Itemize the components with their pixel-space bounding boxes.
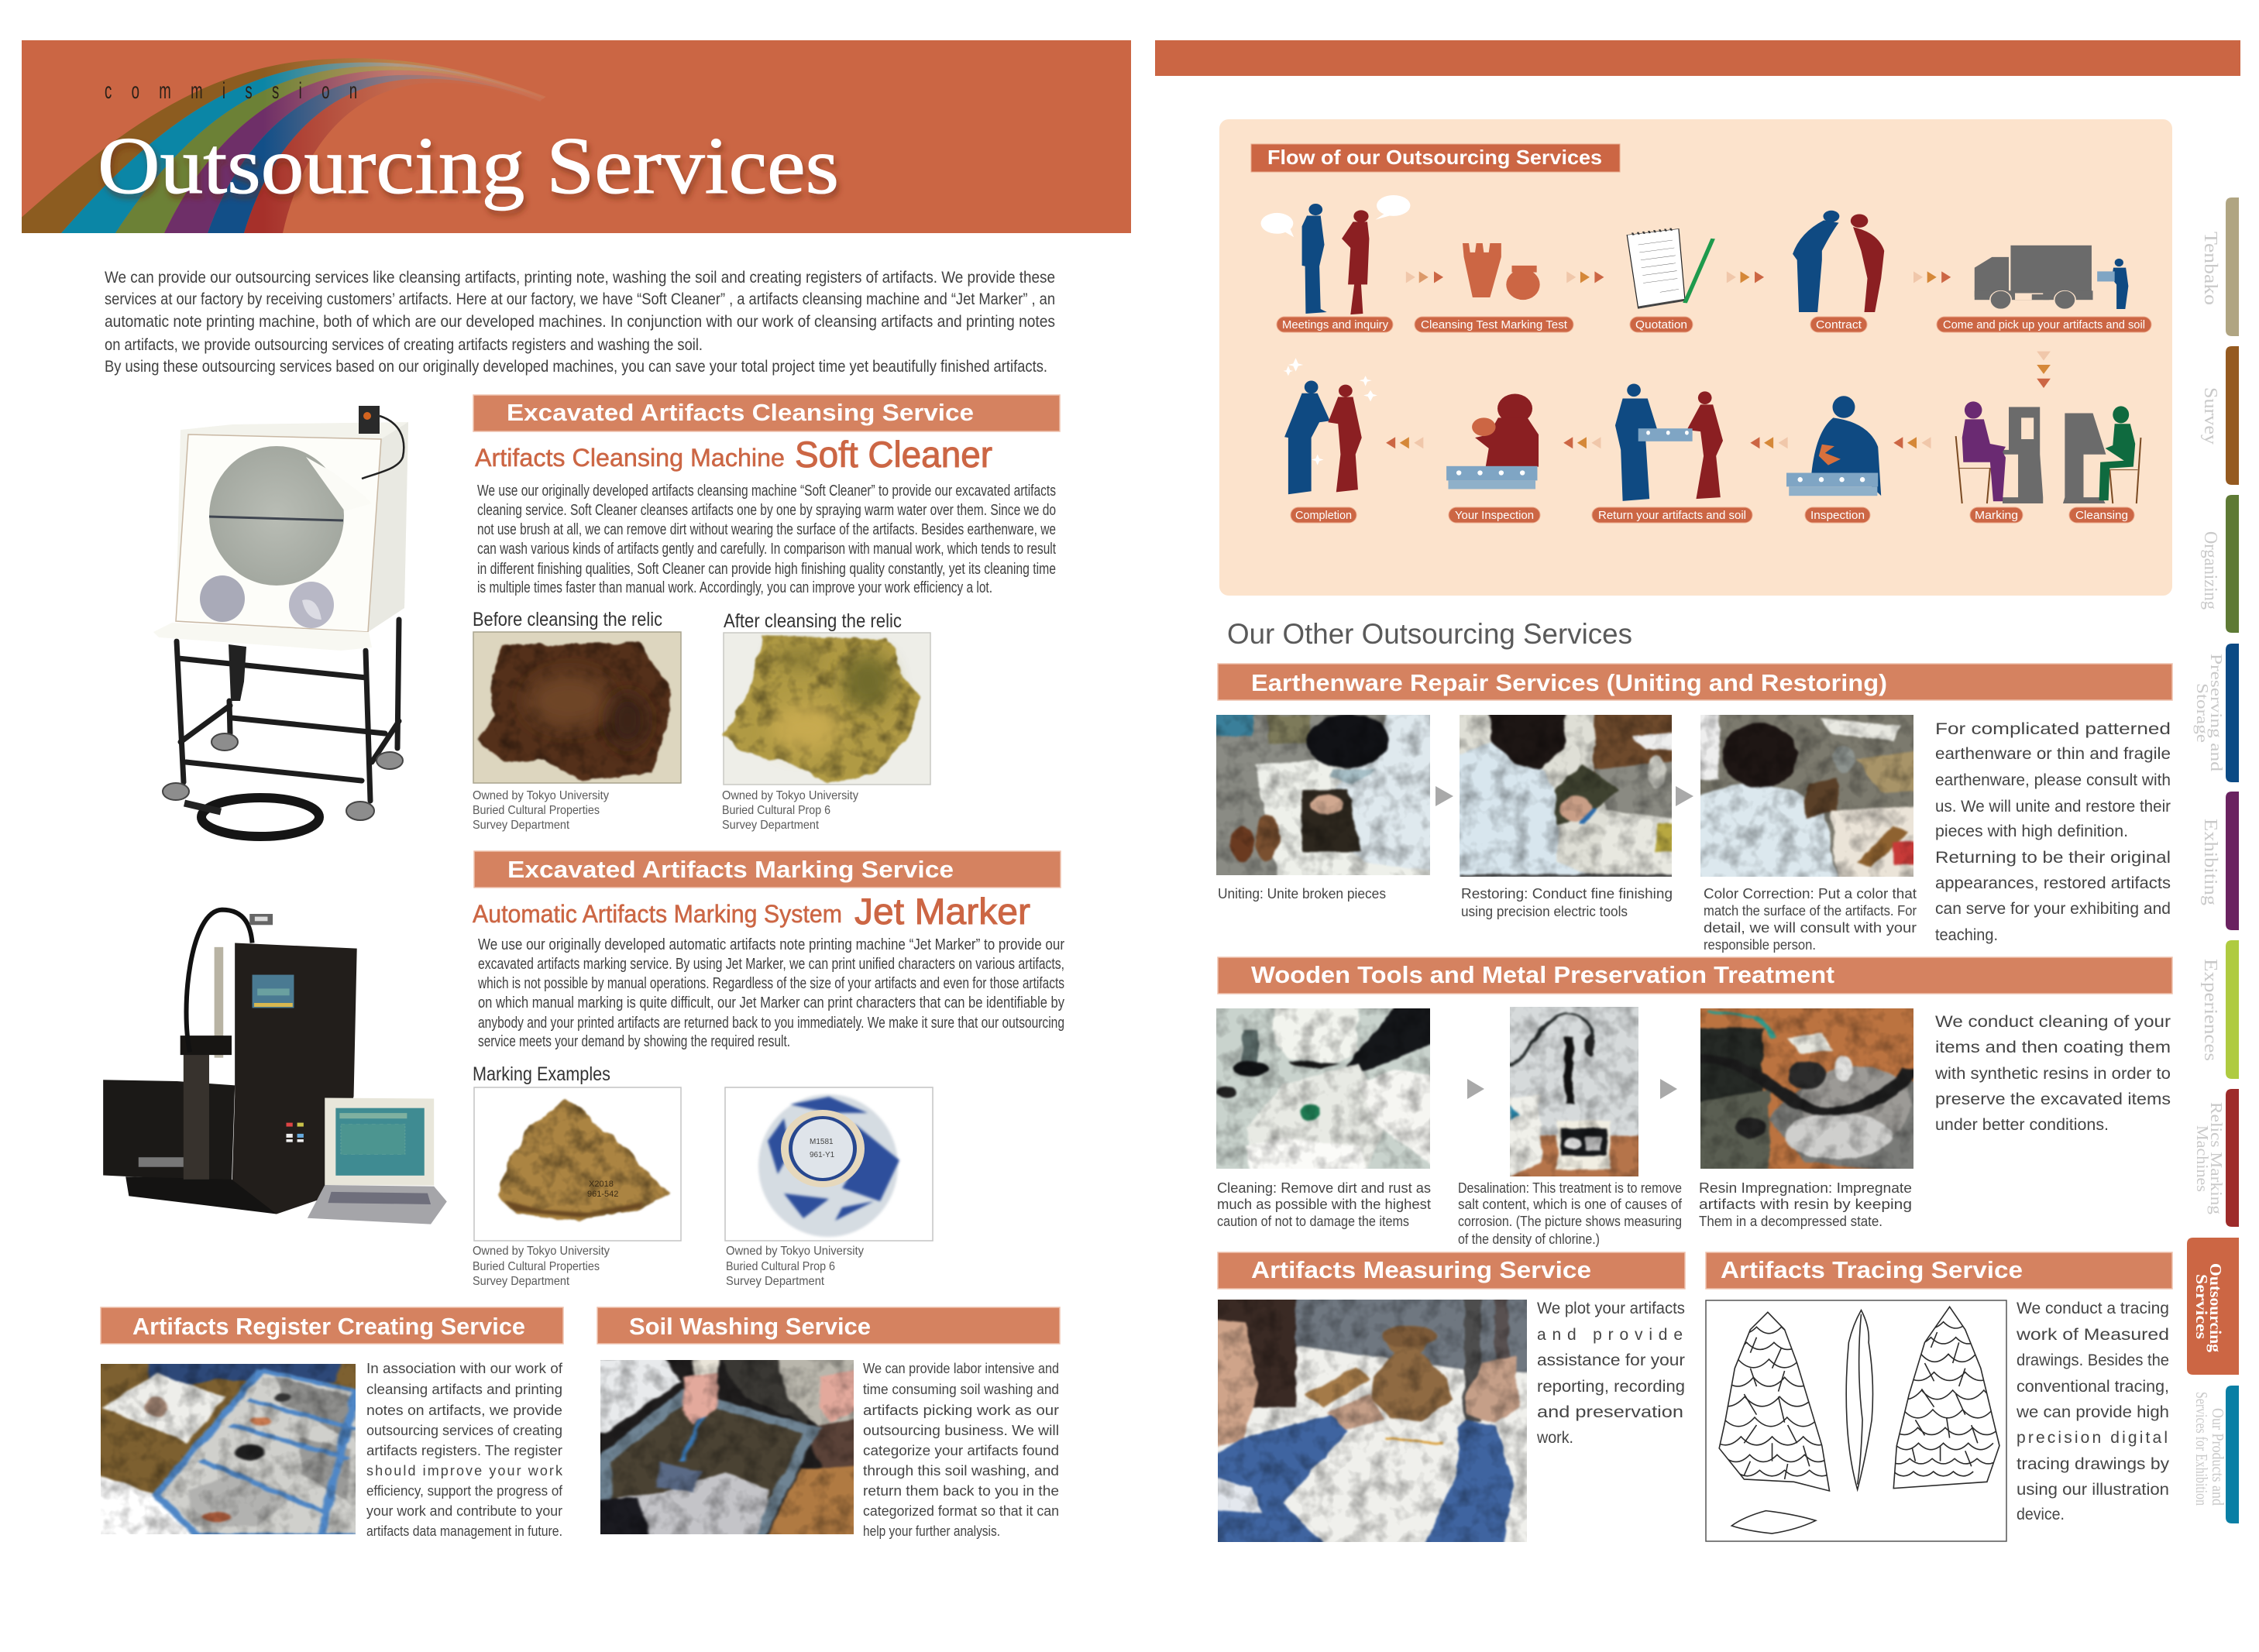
step labels: bottom row: Return your artifacts and soil <box>1598 509 1746 522</box>
eyebrow: commission: commission <box>105 78 357 104</box>
marking examples label: Marking Examples <box>473 1063 610 1085</box>
icon: return artifacts <box>1615 383 1723 501</box>
text block: register service: outsourcing services of creating <box>366 1423 562 1438</box>
text block: wooden tools: with synthetic resins in order to <box>1934 1065 2171 1083</box>
intro paragraph: We can provide our outsourcing services like cleansing artifacts, printing note, washing the soil and creating registers of artifacts. We provide these <box>105 269 1055 287</box>
step labels: top row: Cleansing Test Marking Test <box>1421 318 1568 331</box>
tab: Exhibiting: Exhibiting <box>2200 819 2220 905</box>
text block: earthenware repair: can serve for your exhibiting and <box>1935 900 2171 918</box>
section heading: wooden tools <box>1218 957 2172 994</box>
caption: restoring: Restoring: Conduct fine finishing <box>1461 886 1673 902</box>
text block: register service: efficiency, support the progress of <box>366 1483 563 1499</box>
tab: Our Products and Services for Exhibition: Services for Exhibition <box>2192 1392 2211 1506</box>
section heading: earthenware repair: Earthenware Repair Services (Uniting and Restoring) <box>1251 669 1887 696</box>
tab: Organizing <box>2200 495 2239 633</box>
caption: cleaning: caution of not to damage the items <box>1217 1214 1409 1229</box>
photo: marked bowl <box>725 1087 933 1241</box>
text block: Soft Cleaner description: cleaning service. Soft Cleaner cleanses artifacts one by one by spraying warm water over them. Since we do <box>477 502 1056 519</box>
caption: resin impregnation: Them in a decompressed state. <box>1699 1214 1882 1229</box>
step labels: bottom row: Your Inspection <box>1455 509 1534 522</box>
intro paragraph: automatic note printing machine, both of which are our developed machines. In conjunction with our work of cleansing artifacts and printing notes <box>105 313 1055 331</box>
photo: measuring <box>1218 1300 1527 1542</box>
caption: after relic: Survey Department <box>722 819 819 832</box>
right page top band <box>1155 40 2240 76</box>
tab: Organizing: Organizing <box>2200 531 2220 610</box>
control box and cable <box>359 406 380 434</box>
text block: tracing: work of Measured <box>2016 1326 2169 1344</box>
product title: Jet Marker <box>473 891 1030 932</box>
caption: cleaning: much as possible with the highest <box>1217 1197 1431 1212</box>
photo: resin impregnation <box>1700 1008 1913 1169</box>
text block: measuring: assistance for your <box>1537 1351 1685 1369</box>
section heading: soil washing <box>597 1307 1060 1344</box>
text block: Jet Marker description: anybody and your printed artifacts are returned back to you immediately. We make it sure that our outsourcing <box>478 1015 1064 1032</box>
step labels: top row <box>1277 317 2151 332</box>
section heading: cleansing <box>473 395 1060 431</box>
text block: register service <box>366 1361 563 1539</box>
text block: tracing <box>2016 1300 2170 1523</box>
caption: cleaning <box>1217 1180 1431 1229</box>
tab: Relics Marking Machines: Machines <box>2193 1125 2212 1192</box>
section heading: wooden tools: Wooden Tools and Metal Preservation Treatment <box>1251 961 1834 988</box>
caption: colour correction <box>1704 886 1917 953</box>
tab: Our Products and Services for Exhibition: Our Products and <box>2209 1408 2227 1506</box>
step labels: top row: Meetings and inquiry <box>1282 318 1388 331</box>
arrow: restoring to colour correction <box>1676 786 1693 806</box>
caption: bowl <box>726 1245 864 1288</box>
caption: before relic: Owned by Tokyo University <box>473 789 609 802</box>
caption: desalination: Desalination: This treatment is to remove <box>1458 1180 1682 1196</box>
panel heading: Flow of our Outsourcing Services <box>1267 146 1602 169</box>
photo: register creating <box>101 1364 356 1534</box>
caption: sherd: Owned by Tokyo University <box>473 1245 610 1258</box>
icon: marking and cleansing stations <box>1956 401 2140 503</box>
text block: register service: artifacts data management in future. <box>366 1523 562 1539</box>
coiled hose <box>201 798 319 836</box>
step labels: bottom row: Inspection <box>1810 509 1865 522</box>
caption: sherd: Buried Cultural Properties <box>473 1260 600 1273</box>
text block: soil washing: We can provide labor intensive and <box>863 1361 1059 1376</box>
caption: desalination: of the density of chlorine.) <box>1458 1231 1600 1247</box>
icon: quotation notepad <box>1627 228 1713 308</box>
caption: bowl: Buried Cultural Prop 6 <box>726 1260 835 1273</box>
text block: wooden tools: preserve the excavated items <box>1935 1090 2171 1108</box>
caption: desalination: corrosion. (The picture shows measuring <box>1458 1214 1682 1229</box>
section heading: marking <box>474 851 1061 888</box>
rainbow swoosh <box>4 58 546 233</box>
text block: earthenware repair: earthenware, please consult with <box>1935 771 2171 789</box>
text block: soil washing: time consuming soil washing and <box>863 1382 1059 1397</box>
photo: marked bowl: M1581 <box>810 1138 834 1146</box>
icon: inspection <box>1786 396 1881 496</box>
intro paragraph: services at our factory by receiving customers’ artifacts. Here at our factory, we have “Soft Cleaner” , a artifacts cleansing machine and “Jet Marker” , an <box>105 290 1055 308</box>
caption: colour correction: detail, we will consult with your <box>1704 920 1917 936</box>
icon: truck pickup <box>1975 246 2128 309</box>
tab: Experiences: Experiences <box>2200 959 2220 1061</box>
text block: earthenware repair: teaching. <box>1935 926 1998 944</box>
text block: register service: cleansing artifacts and printing <box>366 1382 562 1397</box>
caption: sherd: Survey Department <box>473 1275 569 1288</box>
caption: before relic: Survey Department <box>473 819 569 832</box>
text block: tracing: tracing drawings by <box>2017 1455 2170 1473</box>
arrow: uniting to restoring <box>1436 786 1453 806</box>
step labels: top row: Come and pick up your artifacts and soil <box>1943 318 2145 331</box>
text block: earthenware repair: earthenware or thin and fragile <box>1935 745 2171 763</box>
tab: Outsourcing Services (active): Services <box>2192 1274 2211 1339</box>
photo: restoring <box>1460 715 1672 877</box>
caption: bowl: Owned by Tokyo University <box>726 1245 864 1258</box>
product title: Soft Cleaner: Soft Cleaner <box>795 434 992 475</box>
heading: other services: Our Other Outsourcing Services <box>1227 618 1632 650</box>
tab: Exhibiting <box>2200 792 2239 930</box>
text block: earthenware repair: appearances, restored artifacts <box>1935 874 2171 892</box>
caption: after relic: Buried Cultural Prop 6 <box>722 804 830 817</box>
text block: Jet Marker description <box>477 936 1064 1050</box>
text block: register service: In association with our work of <box>366 1361 563 1376</box>
photo: marked sherd: X2018 <box>589 1180 614 1189</box>
caption: restoring: using precision electric tools <box>1461 904 1628 919</box>
photo: Jet Marker machine <box>103 910 447 1224</box>
text block: measuring: reporting, recording <box>1537 1378 1685 1396</box>
touch panel <box>253 975 294 1008</box>
button cluster <box>286 1123 304 1142</box>
tab: Outsourcing Services (active): Outsourcing <box>2206 1263 2225 1353</box>
text block: soil washing: categorized format so that it can <box>863 1503 1059 1519</box>
caption: before relic: Buried Cultural Properties <box>473 804 600 817</box>
text block: tracing: We conduct a tracing <box>2017 1300 2169 1317</box>
product title: Jet Marker: Jet Marker <box>854 891 1030 932</box>
caption: resin impregnation: Resin Impregnation: Impregnate <box>1699 1180 1912 1196</box>
caption: colour correction: match the surface of the artifacts. For <box>1704 903 1917 919</box>
support rods <box>215 947 223 1058</box>
text block: measuring <box>1536 1300 1685 1447</box>
tab: Outsourcing Services (active) <box>2187 1238 2239 1375</box>
arrows: downward <box>2037 352 2051 388</box>
product title: Soft Cleaner: Artifacts Cleansing Machine <box>475 444 785 472</box>
cabinet window <box>209 446 344 586</box>
caption: colour correction: responsible person. <box>1704 937 1816 953</box>
machine cabinet <box>232 943 357 1214</box>
icon: contract bow <box>1793 211 1884 312</box>
text block: Soft Cleaner description: not use brush at all, we can remove dirt without wearing the surface of the artifacts. Besides earthenware, we <box>477 521 1056 538</box>
text block: wooden tools: We conduct cleaning of your <box>1935 1013 2171 1031</box>
product title: Soft Cleaner <box>475 434 992 475</box>
text block: wooden tools <box>1934 1013 2171 1134</box>
text block: tracing: using our illustration <box>2017 1481 2169 1499</box>
text block: Soft Cleaner description: We use our originally developed artifacts cleansing machine “Soft Cleaner” to provide our excavated artifacts <box>477 483 1056 500</box>
section heading: register: Artifacts Register Creating Service <box>132 1313 525 1340</box>
tab: Relics Marking Machines <box>2193 1089 2239 1227</box>
caption: resin impregnation: artifacts with resin by keeping <box>1699 1197 1912 1212</box>
step labels: bottom row: Completion <box>1295 509 1352 522</box>
text block: soil washing: return them back to you in the <box>863 1483 1059 1499</box>
text block: soil washing: outsourcing business. We will <box>863 1423 1059 1438</box>
text block: earthenware repair: For complicated patterned <box>1935 720 2171 738</box>
text block: Jet Marker description: on which manual marking is quite difficult, our Jet Marker can print characters that can be identifiable by <box>478 994 1064 1011</box>
photo: marked bowl: 961-Y1 <box>810 1151 835 1159</box>
photo: colour correction <box>1700 715 1913 877</box>
caption: uniting: Uniting: Unite broken pieces <box>1218 886 1386 902</box>
laptop <box>308 1185 447 1224</box>
arrows: bottom row <box>1386 437 1931 448</box>
tab: Our Products and Services for Exhibition <box>2192 1386 2239 1523</box>
after label: After cleansing the relic <box>724 610 902 632</box>
text block: measuring: and provide <box>1537 1326 1683 1344</box>
caption: colour correction: Color Correction: Put a color that <box>1704 886 1917 902</box>
glove ports <box>200 575 245 622</box>
intro paragraph <box>105 269 1055 376</box>
text block: soil washing: help your further analysis. <box>863 1523 1000 1539</box>
tab: Survey: Survey <box>2200 387 2220 445</box>
caption: cleaning: Cleaning: Remove dirt and rust as <box>1217 1180 1431 1196</box>
tab: Preserving and Storage: Storage <box>2193 683 2212 743</box>
tab: Tenbako: Tenbako <box>2200 232 2220 305</box>
cabinet body <box>176 422 408 632</box>
photo: relic before cleansing <box>473 632 681 783</box>
tab: Preserving and Storage <box>2193 644 2239 782</box>
section heading: soil washing: Soil Washing Service <box>629 1313 871 1340</box>
text block: Soft Cleaner description <box>477 483 1056 596</box>
icon: completion handshake <box>1283 358 1377 494</box>
main title: Outsourcing Services <box>98 120 839 211</box>
text block: soil washing: categorize your artifacts found <box>863 1443 1059 1458</box>
tab: Preserving and Storage: Preserving and <box>2207 654 2226 772</box>
text block: register service: artifacts registers. The register <box>366 1443 562 1458</box>
photo: marked sherd: 961-542 <box>587 1190 618 1199</box>
side navigation tabs <box>2187 197 2239 1523</box>
icon: meetings and inquiry <box>1261 195 1410 314</box>
panel: flow of outsourcing services <box>1219 119 2172 596</box>
step labels: top row: Quotation <box>1635 318 1687 331</box>
intro paragraph: on artifacts, we provide outsourcing services of creating artifacts registers and washing the soil. <box>105 336 703 354</box>
text block: earthenware repair: pieces with high definition. <box>1935 823 2128 840</box>
step labels: bottom row: Cleansing <box>2075 509 2128 522</box>
text block: soil washing: through this soil washing, and <box>863 1463 1059 1479</box>
text block: tracing: conventional tracing, <box>2017 1378 2169 1396</box>
text block: Jet Marker description: excavated artifacts marking service. By using Jet Marker, we can print unified characters on various artifacts, <box>478 956 1064 973</box>
tab: Tenbako <box>2200 197 2239 336</box>
photo: uniting <box>1216 715 1430 875</box>
caption: resin impregnation <box>1699 1180 1912 1229</box>
arrows: top row <box>1406 271 1951 283</box>
section heading: measuring <box>1218 1252 1685 1289</box>
step labels: bottom row: Marking <box>1975 509 2018 522</box>
photo: soil washing <box>600 1360 854 1534</box>
icon: test pots <box>1463 243 1540 300</box>
text block: register service: your work and contribute to your <box>366 1503 562 1519</box>
text block: Jet Marker description: which is not possible by manual operations. Regardless of the size of your artifacts and even for those artifacts <box>477 975 1064 992</box>
text block: register service: notes on artifacts, we provide <box>366 1403 562 1418</box>
text block: tracing: we can provide high <box>2016 1403 2169 1421</box>
text block: soil washing <box>863 1361 1059 1539</box>
text block: soil washing: artifacts picking work as our <box>863 1403 1059 1418</box>
title banner <box>4 40 1131 233</box>
photo: desalination <box>1510 1007 1638 1176</box>
text block: Jet Marker description: We use our originally developed automatic artifacts note printing machine “Jet Marker” to provide our <box>478 936 1064 953</box>
section heading: marking: Excavated Artifacts Marking Service <box>507 856 954 883</box>
text block: register service: should improve your work <box>366 1463 563 1479</box>
text block: wooden tools: items and then coating them <box>1935 1039 2171 1056</box>
text block: Soft Cleaner description: can wash various kinds of artifacts gently and carefully. In comparison with manual work, which tends to result <box>477 541 1056 558</box>
photo: relic after cleansing <box>724 633 930 785</box>
text block: tracing: precision digital <box>2017 1429 2168 1447</box>
side profile drawing <box>1846 1310 1872 1489</box>
text block: Soft Cleaner description: in different finishing qualities, Soft Cleaner can provide high finishing quality constantly, yet its cleaning time <box>477 561 1056 578</box>
section heading: tracing <box>1706 1252 2172 1289</box>
caption: after relic: Owned by Tokyo University <box>722 789 858 802</box>
photo: marked sherd <box>474 1087 681 1241</box>
machine legs and frame <box>177 620 399 801</box>
step labels: top row: Contract <box>1816 318 1862 331</box>
text block: measuring: and preservation <box>1537 1403 1683 1421</box>
text block: tracing: drawings. Besides the <box>2017 1351 2169 1369</box>
photo: Soft Cleaner machine <box>153 406 408 836</box>
text block: measuring: We plot your artifacts <box>1537 1300 1685 1317</box>
text block: earthenware repair: Returning to be their original <box>1935 849 2171 867</box>
tab: Experiences <box>2200 940 2239 1079</box>
arrow: desalination to resin <box>1660 1079 1677 1099</box>
tab: Relics Marking Machines: Relics Marking <box>2207 1102 2226 1215</box>
section heading: cleansing: Excavated Artifacts Cleansing Service <box>507 399 974 426</box>
caption: before relic <box>473 789 609 832</box>
arrow: cleaning to desalination <box>1467 1079 1484 1099</box>
caption: restoring <box>1461 886 1673 919</box>
text block: Jet Marker description: service meets your demand by showing the required result. <box>478 1033 790 1050</box>
caption: bowl: Survey Department <box>726 1275 825 1288</box>
product title: Jet Marker: Automatic Artifacts Marking System <box>473 900 842 928</box>
tab: Survey <box>2200 346 2239 485</box>
figure: tracing drawings of stone points <box>1706 1300 2015 1541</box>
section heading: measuring: Artifacts Measuring Service <box>1251 1256 1591 1283</box>
step labels: bottom row <box>1291 507 2134 523</box>
text block: tracing: device. <box>2017 1506 2065 1523</box>
caption: after relic <box>722 789 858 832</box>
machine wheels <box>163 733 403 820</box>
caption: sherd <box>473 1245 610 1288</box>
icon: your inspection <box>1446 394 1539 489</box>
text block: earthenware repair <box>1935 720 2171 944</box>
section heading: tracing: Artifacts Tracing Service <box>1721 1256 2023 1283</box>
right point drawing <box>1893 1306 2000 1489</box>
section heading: register <box>101 1307 563 1344</box>
photo: cleaning <box>1216 1008 1430 1169</box>
caption: desalination: salt content, which is one of causes of <box>1458 1197 1683 1212</box>
text block: Soft Cleaner description: is multiple times faster than manual work. Accordingly, you can improve your work efficiency a lot. <box>477 579 992 596</box>
left point drawing <box>1718 1311 1830 1492</box>
intro paragraph: By using these outsourcing services based on our originally developed machines, you can save your total project time yet beautifully finished artifacts. <box>105 358 1047 376</box>
cross section drawing <box>1731 1511 1816 1534</box>
section heading: earthenware repair <box>1218 664 2172 700</box>
text block: earthenware repair: us. We will unite and restore their <box>1935 798 2171 816</box>
caption: desalination <box>1458 1180 1683 1247</box>
text block: measuring: work. <box>1536 1429 1573 1447</box>
before label: Before cleansing the relic <box>473 609 662 630</box>
text block: wooden tools: under better conditions. <box>1935 1116 2109 1134</box>
